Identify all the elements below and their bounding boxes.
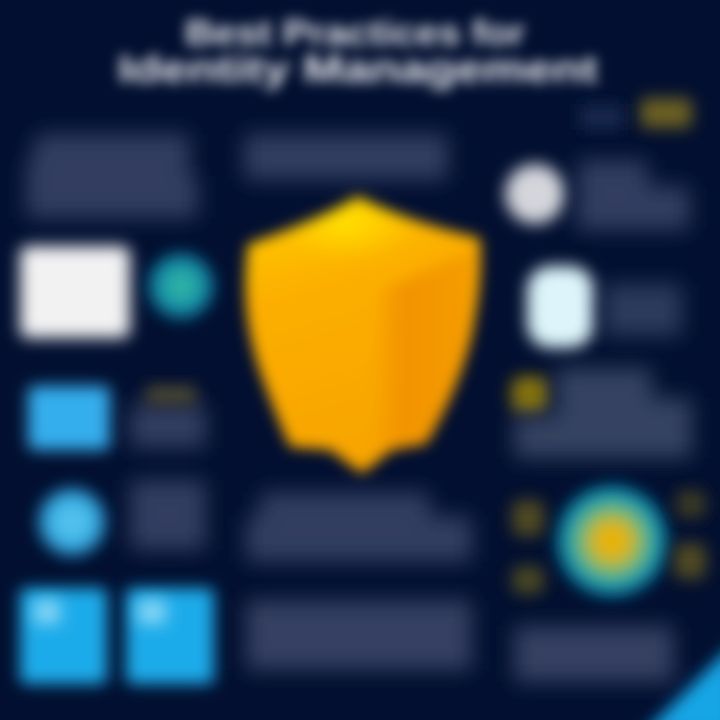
icon: gold square: [511, 376, 549, 414]
text block: right middle: [604, 284, 682, 336]
icon: blue circle: [37, 487, 107, 557]
icon: blue square right: [126, 588, 214, 684]
shield: [245, 196, 481, 474]
icon: white circle: [505, 164, 565, 224]
title: [118, 12, 598, 91]
text block: centre lower: [246, 492, 472, 562]
title: Identity Management: [118, 49, 598, 91]
target diagram: [556, 485, 668, 597]
icon: blue square left: [20, 588, 107, 684]
text block: right lower: [514, 368, 692, 458]
icon: blue rectangle: [28, 386, 110, 450]
text block: top centre: [244, 134, 448, 180]
text block: left lower: [130, 480, 206, 550]
text block: right upper: [576, 160, 690, 230]
icon: top right badge: [580, 98, 692, 130]
corner triangle: [642, 642, 720, 720]
title: Best Practices for: [185, 12, 525, 53]
icon: white square: [20, 246, 130, 338]
text block: bottom right: [514, 626, 674, 682]
icons: gold markers: [512, 490, 706, 594]
text block: centre bottom: [246, 600, 472, 670]
text block: top left: [26, 134, 198, 218]
text block: left middle: [130, 386, 206, 448]
icon: light blue card: [527, 266, 594, 348]
icon: teal circle: [148, 253, 214, 319]
